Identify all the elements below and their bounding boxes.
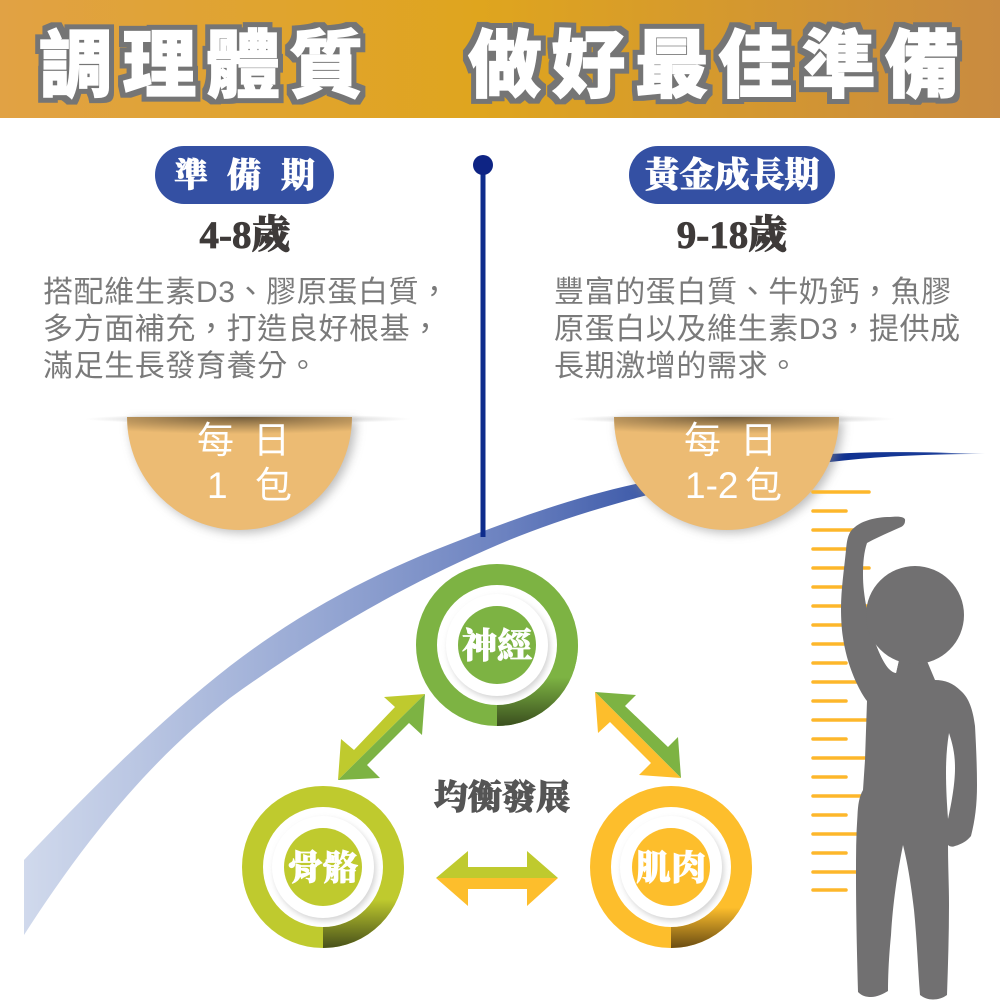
pill: 準備期: 準備期	[174, 157, 315, 195]
icon: gap under raised arm	[875, 642, 900, 673]
icon: gap between arm and torso	[946, 733, 955, 819]
dosage badge: 每日1包	[85, 414, 411, 533]
title left: 調理體質: 調理體質	[39, 24, 373, 107]
node: 骨骼: 骨骼	[288, 849, 358, 888]
node: 神經	[416, 564, 578, 726]
panel: golden growth stage	[554, 146, 961, 533]
description text: 長期激增的需求。	[554, 350, 799, 383]
pill: 準備期	[155, 146, 334, 204]
dosage badge: 每日1包: 1	[207, 465, 228, 506]
arrow: 骨骼 to 肌肉	[436, 851, 558, 906]
node: 骨骼	[242, 786, 404, 948]
title right: 做好最佳準備: 做好最佳準備	[468, 24, 968, 107]
arrow: 骨骼 to 神經	[338, 694, 425, 780]
dosage badge: 每日1-2包	[569, 414, 895, 533]
header banner	[0, 0, 1000, 118]
age: 4-8歲: 4-8歲	[200, 214, 290, 257]
panel: preparation stage	[43, 146, 450, 533]
icon: head	[866, 566, 964, 664]
node: 肌肉	[590, 786, 752, 948]
description text: 原蛋白以及維生素D3，提供成	[554, 313, 961, 346]
description text: 滿足生長發育養分。	[43, 350, 318, 383]
dosage badge: 每日1-2包: 日	[740, 420, 777, 461]
height ruler ticks	[813, 492, 869, 890]
dosage badge: 每日1包: 每	[197, 420, 234, 461]
description text: 搭配維生素D3、膠原蛋白質，	[43, 276, 450, 309]
growth curve	[24, 452, 985, 935]
age: 9-18歲: 9-18歲	[677, 214, 787, 257]
pill: 黃金成長期	[629, 146, 835, 204]
dosage badge: 每日1包: 日	[253, 420, 290, 461]
timeline pole with dot	[473, 155, 493, 537]
dosage badge: 每日1-2包: 每	[684, 420, 721, 461]
dosage badge: 每日1-2包: 包	[745, 465, 782, 506]
description text	[43, 276, 450, 383]
description text	[554, 276, 961, 383]
description text: 多方面補充，打造良好根基，	[43, 313, 441, 346]
dosage badge: 每日1-2包: 1-2	[685, 465, 738, 506]
icon: person silhouette measuring height	[841, 517, 977, 1000]
pill: 黃金成長期: 黃金成長期	[644, 156, 820, 195]
center label: 均衡發展: 均衡發展	[434, 779, 570, 817]
dosage badge: 每日1包: 包	[255, 465, 292, 506]
arrow: 神經 to 肌肉	[595, 692, 681, 778]
node: 神經: 神經	[462, 627, 532, 666]
node: 肌肉: 肌肉	[636, 849, 706, 888]
description text: 豐富的蛋白質、牛奶鈣，魚膠	[554, 276, 952, 309]
